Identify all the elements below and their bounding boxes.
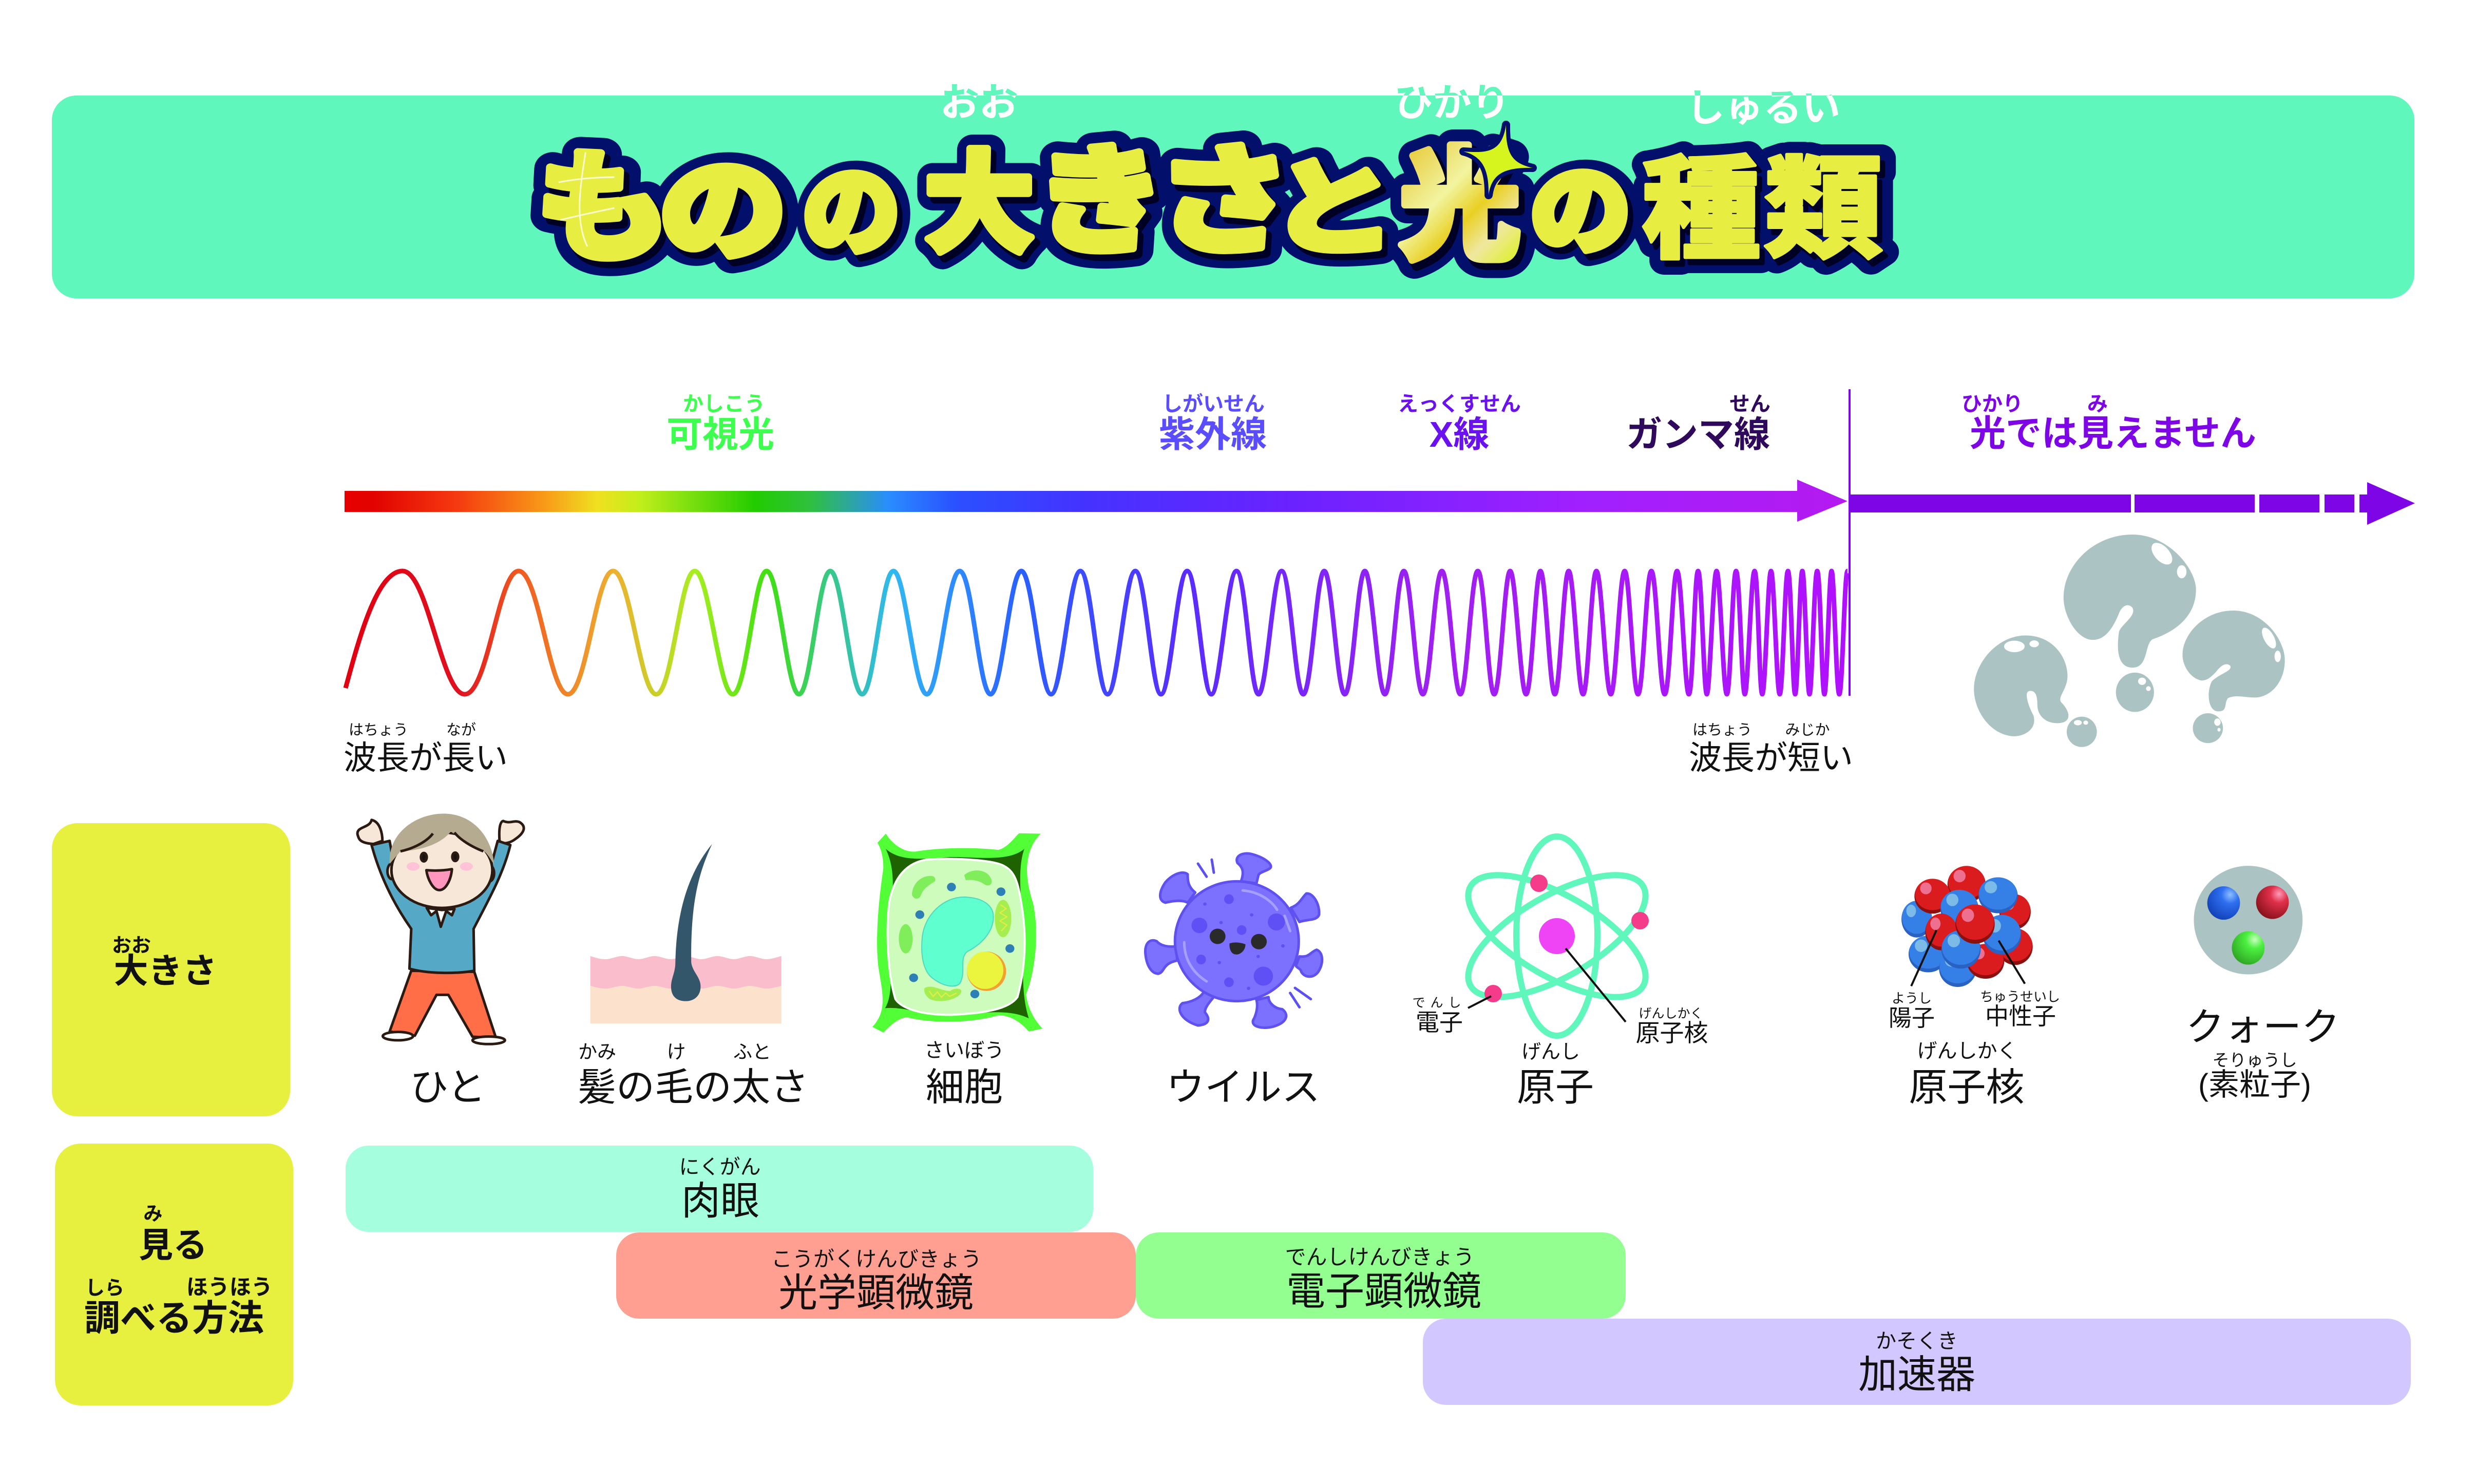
tool bar: electron microscope — [1136, 1232, 1626, 1319]
label: atom — [1517, 1041, 1594, 1109]
title text: 光 — [1402, 141, 1523, 276]
label: x-ray: えっくすせん — [1398, 393, 1521, 415]
tool bar: optical microscope — [616, 1232, 1136, 1319]
title glints — [559, 153, 614, 246]
title furigana: ひかり — [1394, 81, 1510, 124]
wave — [346, 571, 1848, 694]
category box: methods: ほうほう — [186, 1275, 273, 1299]
label: not visible — [1961, 393, 2256, 453]
category box: methods: 調べる方法 — [84, 1298, 264, 1338]
tool bar: optical microscope: 光学顕微鏡 — [778, 1271, 974, 1315]
label: visible light: かしこう — [683, 393, 765, 415]
icon: virus — [1146, 853, 1322, 1028]
label: quark: そりゅうし — [2212, 1051, 2297, 1070]
title furigana: しゅるい — [1686, 86, 1840, 129]
icon: plant cell — [872, 833, 1042, 1033]
title text: 類 — [1766, 148, 1885, 274]
icon: person — [357, 813, 524, 1044]
title text: 種 — [1644, 148, 1763, 274]
label: not visible: み — [2087, 393, 2108, 415]
title text: の — [660, 150, 786, 274]
title text: も — [536, 142, 670, 275]
tool bar: electron microscope: でんしけんびきょう — [1285, 1245, 1475, 1269]
tool bar: naked eye: 肉眼 — [681, 1179, 759, 1223]
title text: の — [662, 151, 789, 276]
label: cell: さいぼう — [924, 1040, 1004, 1062]
label: visible light: 可視光 — [666, 414, 774, 454]
category box: methods: 見る — [139, 1226, 207, 1265]
title text: と — [1273, 151, 1399, 269]
icon: nucleus — [1901, 866, 2033, 987]
title text: と — [1275, 156, 1401, 273]
label: atomic nucleus callout: 原子核 — [1636, 1019, 1708, 1047]
spectrum labels — [666, 393, 2256, 454]
title text: と — [1271, 150, 1396, 268]
glyph: gold 光: 光 — [1399, 139, 1520, 275]
tool bar: accelerator: 加速器 — [1858, 1353, 1975, 1397]
icon: question bubbles — [1974, 535, 2285, 747]
label: gamma ray: せん — [1729, 393, 1770, 415]
title text — [536, 125, 1888, 281]
label: ultraviolet: しがいせん — [1162, 393, 1265, 415]
title text: の — [1530, 157, 1631, 266]
label: virus: ウイルス — [1166, 1066, 1320, 1109]
title text: さ — [1157, 137, 1291, 267]
category box: methods — [55, 1144, 293, 1405]
label: short wavelength: 波長が短い — [1689, 739, 1853, 776]
label: short wavelength: みじか — [1785, 722, 1830, 738]
tool bar: naked eye — [346, 1146, 1093, 1232]
label: gamma ray: ガンマ線 — [1626, 414, 1770, 454]
label: electron: 電子 — [1416, 1009, 1463, 1036]
label: quark — [2186, 1005, 2340, 1102]
title text: 大 — [927, 145, 1037, 268]
title text: も — [539, 144, 672, 277]
label: cell: 細胞 — [926, 1066, 1003, 1109]
title text: 類 — [1768, 153, 1888, 278]
label: quark: クォーク — [2186, 1005, 2340, 1049]
label: atom: 原子 — [1517, 1066, 1594, 1109]
label: atomic nucleus callout: げんしかく — [1639, 1006, 1703, 1021]
label: gamma ray — [1626, 393, 1770, 454]
label: proton: ようし — [1892, 991, 1932, 1006]
label: short wavelength: はちょう — [1692, 722, 1752, 738]
label: long wavelength: なが — [446, 721, 476, 738]
title furigana: しゅるい — [1686, 86, 1840, 129]
icon: hair follicle — [591, 844, 782, 1023]
title text: 光 — [1404, 145, 1525, 280]
label: hair thickness: ふと — [733, 1041, 771, 1062]
title text: 類 — [1764, 147, 1883, 272]
title text: の — [664, 156, 791, 280]
label: proton: 陽子 — [1889, 1005, 1935, 1031]
title furigana: おお — [940, 81, 1018, 125]
label: atomic nucleus: げんしかく — [1917, 1040, 2017, 1062]
label: x-ray — [1398, 393, 1521, 454]
title text: の — [807, 164, 905, 273]
label: atom: げんし — [1521, 1041, 1580, 1063]
title text: の — [1535, 163, 1635, 272]
label: ultraviolet — [1159, 393, 1267, 454]
label: short wavelength — [1689, 722, 1853, 776]
label: person: ひと — [410, 1066, 486, 1109]
title text: き — [1038, 139, 1168, 269]
label: not visible: 光では見えません — [1970, 413, 2256, 453]
label: hair thickness — [578, 1041, 809, 1109]
label: atomic nucleus: 原子核 — [1909, 1066, 2025, 1109]
title text: き — [1035, 137, 1166, 268]
title text: の — [803, 159, 900, 268]
label: hair thickness: かみ — [578, 1041, 616, 1062]
label: hair thickness: け — [666, 1041, 686, 1062]
icon: atom — [1450, 836, 1664, 1036]
tool bar: optical microscope: こうがくけんびきょう — [771, 1247, 982, 1271]
label: not visible: ひかり — [1961, 393, 2023, 415]
label: long wavelength: 波長が長い — [344, 739, 508, 776]
tool bar: accelerator — [1423, 1319, 2411, 1405]
title text: 種 — [1646, 153, 1765, 278]
label: long wavelength: はちょう — [349, 722, 408, 738]
title text: の — [1533, 159, 1633, 268]
title text: さ — [1162, 142, 1296, 273]
label: x-ray: X線 — [1430, 414, 1489, 454]
tool bar: naked eye: にくがん — [679, 1156, 761, 1178]
title text: さ — [1160, 138, 1293, 269]
label: proton — [1889, 991, 1935, 1031]
title furigana: ひかり — [1394, 81, 1510, 124]
title text: 大 — [929, 149, 1039, 272]
label: electron — [1412, 996, 1466, 1036]
label: cell — [924, 1040, 1004, 1109]
tool bar: accelerator: かそくき — [1876, 1330, 1958, 1353]
tool bar: electron microscope: 電子顕微鏡 — [1286, 1270, 1481, 1314]
category box: methods: しら — [85, 1278, 124, 1299]
label: electron: でんし — [1412, 996, 1466, 1010]
label: quark: (素粒子) — [2198, 1068, 2311, 1102]
label: atomic nucleus — [1909, 1040, 2025, 1109]
label: atomic nucleus callout — [1636, 1006, 1708, 1047]
label: neutron: 中性子 — [1985, 1003, 2056, 1030]
dashed arrow beyond visible — [1851, 482, 2415, 525]
title furigana — [943, 84, 1838, 125]
label: hair thickness: 髪の毛の太さ — [578, 1066, 809, 1109]
divider line — [1849, 389, 1851, 696]
title text: き — [1040, 143, 1170, 273]
label: long wavelength — [344, 721, 508, 776]
icon: star — [1463, 125, 1533, 195]
label: neutron — [1980, 989, 2060, 1030]
category box: size: 大きさ — [114, 952, 217, 991]
label: ultraviolet: 紫外線 — [1159, 414, 1267, 454]
label: visible light — [666, 393, 774, 454]
category box: size — [52, 823, 290, 1116]
label: neutron: ちゅうせいし — [1980, 989, 2060, 1004]
title text: も — [541, 148, 674, 281]
title band — [52, 96, 2414, 298]
title furigana: おお — [940, 81, 1018, 125]
title text: の — [805, 160, 903, 269]
icon: quark — [2194, 866, 2302, 974]
title text: 種 — [1642, 147, 1761, 272]
spectrum arrow — [345, 480, 1848, 522]
category box: methods: み — [144, 1203, 162, 1224]
category box: size: おお — [112, 935, 151, 957]
title text: 大 — [924, 143, 1034, 266]
